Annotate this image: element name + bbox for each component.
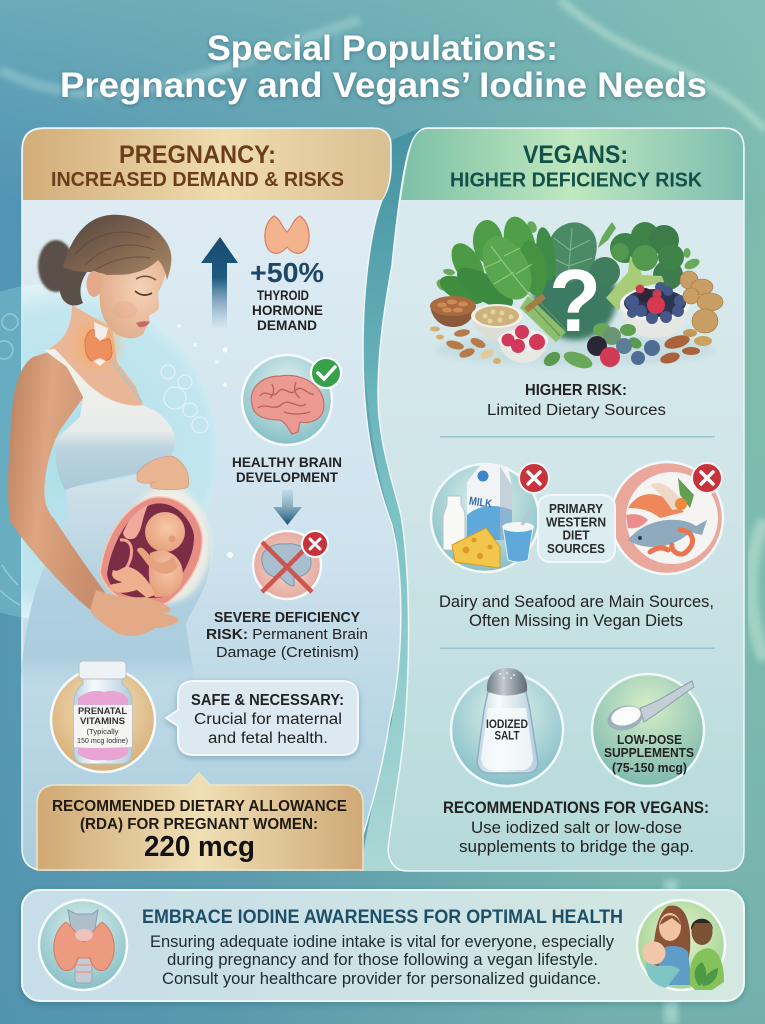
header band: INCREASED DEMAND & RISKS	[51, 169, 344, 191]
badge: x	[519, 463, 549, 493]
icon: brain deficiency	[253, 531, 328, 599]
label: primary western diet sources: PRIMARY	[549, 501, 603, 516]
dress skirt and belly	[20, 470, 211, 690]
panel body	[378, 128, 744, 871]
arm and shoulder	[8, 350, 105, 612]
dark center patch	[533, 256, 617, 340]
spinach	[436, 213, 566, 342]
fetus	[110, 512, 185, 598]
cheese	[452, 528, 500, 568]
question mark: ?	[549, 251, 601, 350]
title: Pregnancy and Vegans’ Iodine Needs	[60, 66, 707, 105]
icon: thyroid	[265, 216, 309, 253]
loose leaves and berries	[541, 323, 660, 372]
scattered almonds	[430, 326, 501, 364]
sparkles	[177, 324, 233, 558]
badge: check	[311, 358, 341, 388]
label: primary western diet sources: SOURCES	[547, 541, 605, 556]
icon: iodized salt: IODIZED	[486, 717, 528, 731]
strap	[111, 360, 142, 402]
face	[98, 251, 166, 338]
text: recommendations	[443, 798, 709, 856]
badge: x	[692, 463, 722, 493]
icon: prenatal vitamins: 150 mcg Iodine)	[77, 738, 128, 745]
text: severe deficiency: RISK: Permanent Brain	[206, 626, 368, 643]
icon: low-dose supplements	[592, 674, 704, 786]
text: severe deficiency: SEVERE DEFICIENCY	[214, 609, 360, 626]
panel: footer	[22, 890, 744, 1001]
panel: pregnancy	[0, 128, 401, 870]
icon: thyroid gland	[39, 900, 127, 990]
chest skin	[47, 305, 146, 414]
raspberry bowl	[498, 325, 548, 363]
icon: iodized salt: SALT	[494, 728, 520, 742]
almond bowl	[430, 296, 476, 327]
icon: low-dose supplements: SUPPLEMENTS	[604, 746, 694, 760]
text: dairy and seafood	[439, 592, 714, 630]
berry bowl	[620, 282, 690, 338]
header band	[401, 129, 743, 200]
stat: thyroid demand: DEMAND	[257, 317, 317, 333]
neck thyroid	[85, 322, 112, 366]
icon: dairy	[431, 463, 549, 572]
illustration: vegan foods	[430, 213, 723, 372]
callout: safe and necessary: Crucial for maternal	[194, 711, 342, 728]
panel: vegans	[378, 128, 744, 871]
panel body	[22, 128, 401, 870]
icon: family	[637, 900, 725, 990]
icon: prenatal vitamins: (Typically	[86, 729, 119, 736]
text: recommendations: Use iodized salt or low-dose	[471, 818, 682, 837]
stat: thyroid demand: +50%	[250, 257, 324, 288]
callout: RDA: RECOMMENDED DIETARY ALLOWANCE	[52, 798, 347, 815]
footer text	[150, 933, 615, 988]
text: healthy brain: DEVELOPMENT	[236, 469, 338, 485]
thyroid glow	[67, 315, 127, 375]
icon: prenatal vitamins: VITAMINS	[80, 716, 125, 727]
stat: thyroid demand: THYROID	[257, 287, 309, 303]
sprigs	[434, 220, 701, 293]
dress top	[44, 349, 175, 490]
text: severe deficiency: Damage (Cretinism)	[216, 644, 359, 661]
text: higher risk: HIGHER RISK:	[525, 382, 627, 399]
lower hand	[90, 590, 179, 636]
ear	[86, 271, 102, 297]
ribbon between panels	[360, 128, 420, 871]
label: primary western diet sources	[538, 495, 615, 562]
stat: thyroid demand: HORMONE	[252, 302, 323, 318]
bubbles	[161, 365, 208, 433]
text: recommendations: RECOMMENDATIONS FOR VEGANS:	[443, 798, 709, 817]
footer text: Ensuring adequate iodine intake is vital for everyone, especially	[150, 933, 615, 951]
icon: low-dose supplements: (75-150 mcg)	[612, 761, 687, 775]
callout: safe and necessary: and fetal health.	[208, 730, 328, 747]
icon: up arrow	[201, 237, 238, 328]
grains bowl	[471, 304, 523, 340]
callout: RDA: 220 mcg	[144, 831, 255, 863]
text: healthy brain	[232, 454, 342, 485]
text: healthy brain: HEALTHY BRAIN	[232, 454, 342, 470]
footer heading: EMBRACE IODINE AWARENESS FOR OPTIMAL HEALTH	[142, 907, 623, 928]
header band: PREGNANCY:	[119, 141, 276, 169]
upper hand	[137, 456, 189, 490]
callout: safe and necessary: SAFE & NECESSARY:	[191, 692, 344, 709]
header band	[23, 129, 390, 200]
text: higher risk	[487, 382, 666, 419]
text: recommendations: supplements to bridge the gap.	[459, 837, 694, 856]
icon: seafood plate	[611, 462, 723, 574]
icon: prenatal vitamins	[51, 661, 155, 772]
arrow: down	[273, 490, 302, 525]
text: severe deficiency	[206, 609, 368, 661]
callout: RDA: (RDA) FOR PREGNANT WOMEN:	[80, 816, 318, 833]
footer text: during pregnancy and for those following a vegan lifestyle.	[167, 951, 598, 969]
hair bun	[38, 240, 74, 292]
belly glow	[126, 487, 210, 603]
label: primary western diet sources: DIET	[562, 528, 590, 542]
footer text: Consult your healthcare provider for personalized guidance.	[162, 970, 601, 988]
label: primary western diet sources: WESTERN	[546, 514, 606, 530]
header band: HIGHER DEFICIENCY RISK	[450, 170, 703, 192]
icon: prenatal vitamins: PRENATAL	[78, 706, 127, 717]
broccoli	[590, 222, 684, 310]
callout: RDA	[37, 773, 363, 870]
callout: safe and necessary	[166, 681, 358, 755]
womb	[100, 497, 202, 606]
hair	[63, 215, 171, 280]
walnuts	[680, 271, 723, 333]
background sphere	[22, 284, 218, 618]
icon: low-dose supplements: LOW-DOSE	[617, 733, 682, 747]
title: Special Populations:	[207, 29, 558, 68]
illustration: pregnant woman	[8, 215, 211, 690]
collard leaf	[548, 222, 597, 283]
milk bottle	[443, 496, 465, 550]
text: dairy and seafood: Often Missing in Vegan Diets	[469, 611, 683, 630]
pecans	[659, 329, 712, 365]
yogurt	[503, 527, 533, 562]
badge: x	[302, 531, 328, 557]
back hair	[59, 250, 87, 305]
stat: thyroid demand	[201, 216, 324, 333]
title	[60, 29, 707, 105]
icon: healthy brain	[242, 355, 341, 445]
header band: VEGANS:	[523, 141, 628, 169]
text: higher risk: Limited Dietary Sources	[487, 402, 666, 419]
text: dairy and seafood: Dairy and Seafood are Main Sources,	[439, 592, 714, 611]
icon: iodized salt	[451, 668, 563, 786]
milk carton: MILK	[468, 495, 493, 511]
